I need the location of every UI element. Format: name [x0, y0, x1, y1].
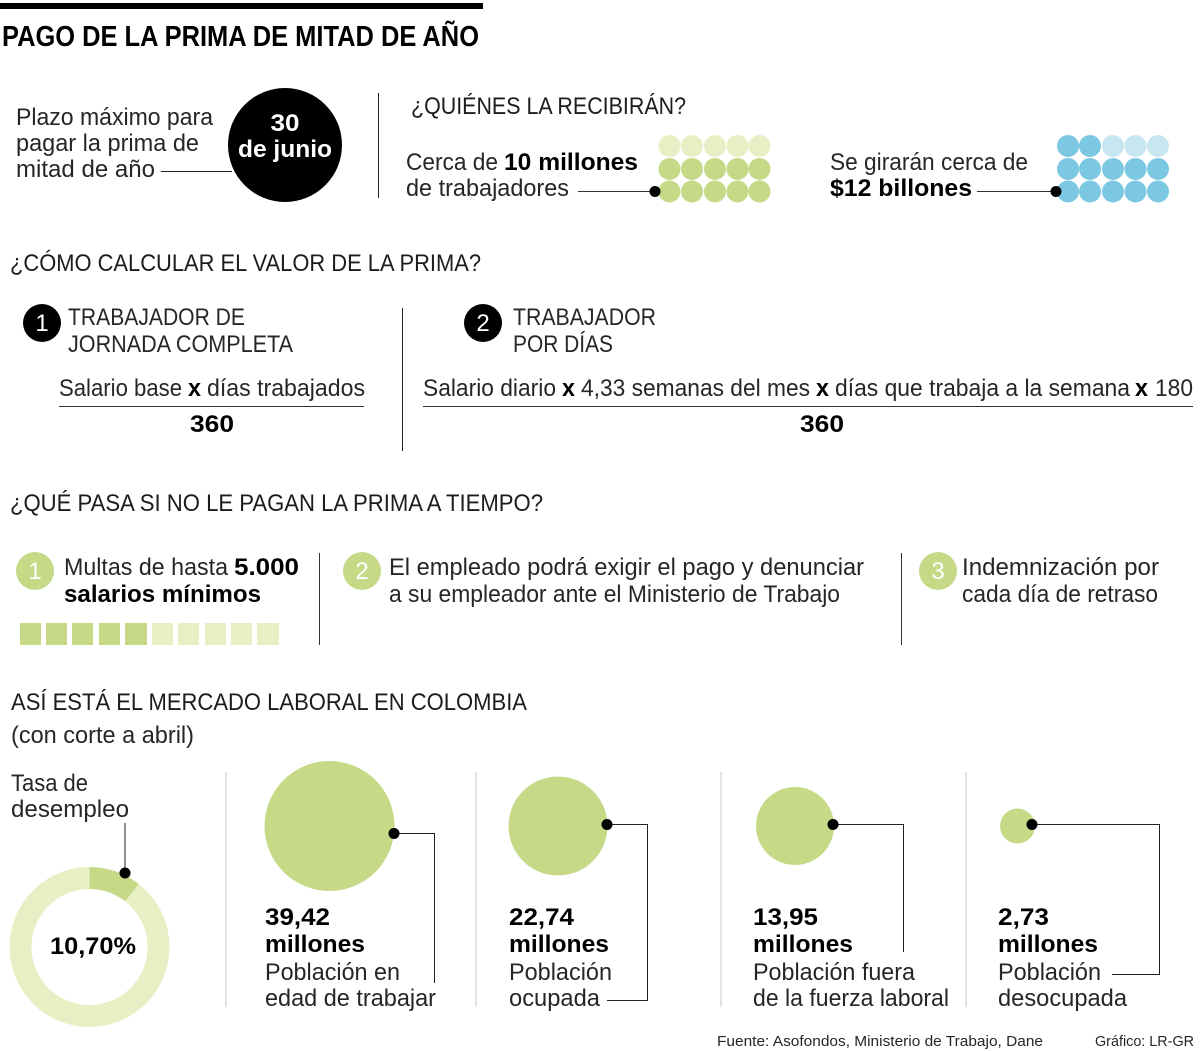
value text: 13,95 [753, 904, 818, 931]
heading: que pasa: ¿QUÉ PASA SI NO LE PAGAN LA PRIMA A TIEMPO? [10, 490, 543, 517]
fines text: 5.000 [234, 554, 299, 581]
formula 1: Salario base [59, 375, 182, 402]
panel: daily worker [423, 304, 1193, 438]
panel: working-age population [264, 761, 436, 1012]
badge 3: 3 [931, 558, 945, 585]
deadline circle [228, 88, 342, 202]
deadline label: mitad de año [16, 156, 155, 183]
leader line [828, 819, 904, 952]
leader line [602, 819, 648, 1000]
workers text [406, 149, 638, 202]
panel: workers [406, 135, 770, 202]
compensation text: Indemnización por [962, 554, 1159, 581]
value text [998, 904, 1128, 1012]
donut chart [20, 867, 158, 1016]
workers text: 10 millones [504, 149, 638, 176]
value text: Población fuera [753, 959, 916, 986]
source credit: Gráfico: LR-GR [1095, 1033, 1194, 1050]
unemployment label [11, 770, 129, 823]
badge 2 [343, 552, 381, 590]
formula 2: Salario diario [423, 375, 556, 402]
value text: millones [998, 931, 1098, 958]
title [0, 3, 483, 53]
bubble 22,74 [508, 776, 608, 876]
badge 2 [464, 304, 502, 342]
workers text: de trabajadores [406, 175, 569, 202]
value text [509, 904, 612, 1012]
formula 2: 360 [800, 411, 844, 438]
formula 2: 180 [1155, 375, 1193, 402]
leader line [1026, 819, 1160, 974]
squares scale [20, 623, 279, 645]
value text: desocupada [998, 985, 1128, 1012]
title: PAGO DE LA PRIMA DE MITAD DE AÑO [2, 21, 479, 53]
formula 2: 4,33 semanas del mes [581, 375, 810, 402]
panel: consequence 1 [16, 552, 299, 645]
complaint text [389, 554, 864, 608]
bubble 2,73 [1000, 808, 1035, 844]
source credit: Fuente: Asofondos, Ministerio de Trabajo, Dane [717, 1033, 1043, 1050]
bubble 39,42 [264, 761, 394, 891]
badge 2: 2 [355, 558, 369, 585]
source credit [717, 1033, 1194, 1050]
value text: 22,74 [509, 904, 575, 931]
badge 1: 1 [28, 558, 42, 585]
heading: como calcular: ¿CÓMO CALCULAR EL VALOR DE LA PRIMA? [10, 250, 481, 277]
leader line [388, 828, 434, 983]
compensation text: cada día de retraso [962, 581, 1158, 608]
formula 2: x [562, 375, 576, 402]
heading: mercado laboral [11, 689, 527, 749]
fines text [64, 554, 299, 608]
formula 2: días que trabaja a la semana [835, 375, 1131, 402]
badge 2: 2 [476, 310, 490, 337]
formula 1: x [188, 375, 202, 402]
heading: mercado laboral: ASÍ ESTÁ EL MERCADO LABORAL EN COLOMBIA [11, 689, 527, 716]
panel: full-time worker [23, 304, 365, 438]
daily worker label: TRABAJADOR [513, 304, 656, 331]
deadline label [16, 104, 214, 183]
value text: Población [998, 959, 1101, 986]
workers text: Cerca de [406, 149, 498, 176]
value text [265, 904, 436, 1012]
daily worker label [513, 304, 656, 358]
formula 2 [423, 375, 1193, 438]
panel: deadline [16, 88, 342, 202]
formula 1: días trabajados [207, 375, 365, 402]
complaint text: a su empleador ante el Ministerio de Trabajo [389, 581, 840, 608]
compensation text [962, 554, 1159, 608]
donut chart: 10,70% [50, 933, 136, 960]
deadline circle: 30 [270, 110, 300, 137]
panel: unemployed population [998, 808, 1160, 1012]
formula 1: 360 [190, 411, 234, 438]
panel: consequence 2 [343, 552, 864, 608]
value text: millones [265, 931, 365, 958]
billions text [830, 149, 1028, 202]
deadline circle: de junio [238, 136, 332, 163]
panel: outside labor force [753, 787, 949, 1012]
bubble 13,95 [756, 787, 834, 865]
deadline label: pagar la prima de [16, 130, 199, 157]
value text: ocupada [509, 985, 601, 1012]
panel: employed population [508, 776, 648, 1012]
fines text: salarios mínimos [64, 581, 261, 608]
panel: unemployment donut [11, 770, 158, 1016]
unemployment label: desempleo [11, 796, 129, 823]
value text: Población en [265, 959, 400, 986]
deadline label: Plazo máximo para [16, 104, 214, 131]
value text: millones [753, 931, 853, 958]
badge 1: 1 [35, 310, 49, 337]
billions text: $12 billones [830, 175, 972, 202]
value text: 2,73 [998, 904, 1049, 931]
panel: consequence 3 [919, 552, 1159, 608]
heading: quienes la recibiran: ¿QUIÉNES LA RECIBIRÁN? [411, 93, 686, 120]
badge 1 [23, 304, 61, 342]
full-time label: JORNADA COMPLETA [68, 331, 293, 358]
complaint text: El empleado podrá exigir el pago y denunciar [389, 554, 864, 581]
blue dot grid [1057, 135, 1169, 202]
unemployment label: Tasa de [11, 770, 88, 797]
value text [753, 904, 949, 1012]
badge 1 [16, 552, 54, 590]
billions text: Se girarán cerca de [830, 149, 1028, 176]
formula 2: x [1135, 375, 1149, 402]
value text: 39,42 [265, 904, 330, 931]
full-time label [68, 304, 293, 358]
green dot grid [658, 135, 770, 202]
badge 3 [919, 552, 957, 590]
full-time label: TRABAJADOR DE [68, 304, 245, 331]
formula 1 [59, 375, 365, 438]
daily worker label: POR DÍAS [513, 331, 613, 358]
value text: Población [509, 959, 612, 986]
value text: millones [509, 931, 609, 958]
formula 2: x [816, 375, 830, 402]
heading: mercado laboral: (con corte a abril) [11, 722, 194, 749]
fines text: Multas de hasta [64, 554, 229, 581]
value text: de la fuerza laboral [753, 985, 949, 1012]
value text: edad de trabajar [265, 985, 436, 1012]
panel: billions [830, 135, 1169, 202]
